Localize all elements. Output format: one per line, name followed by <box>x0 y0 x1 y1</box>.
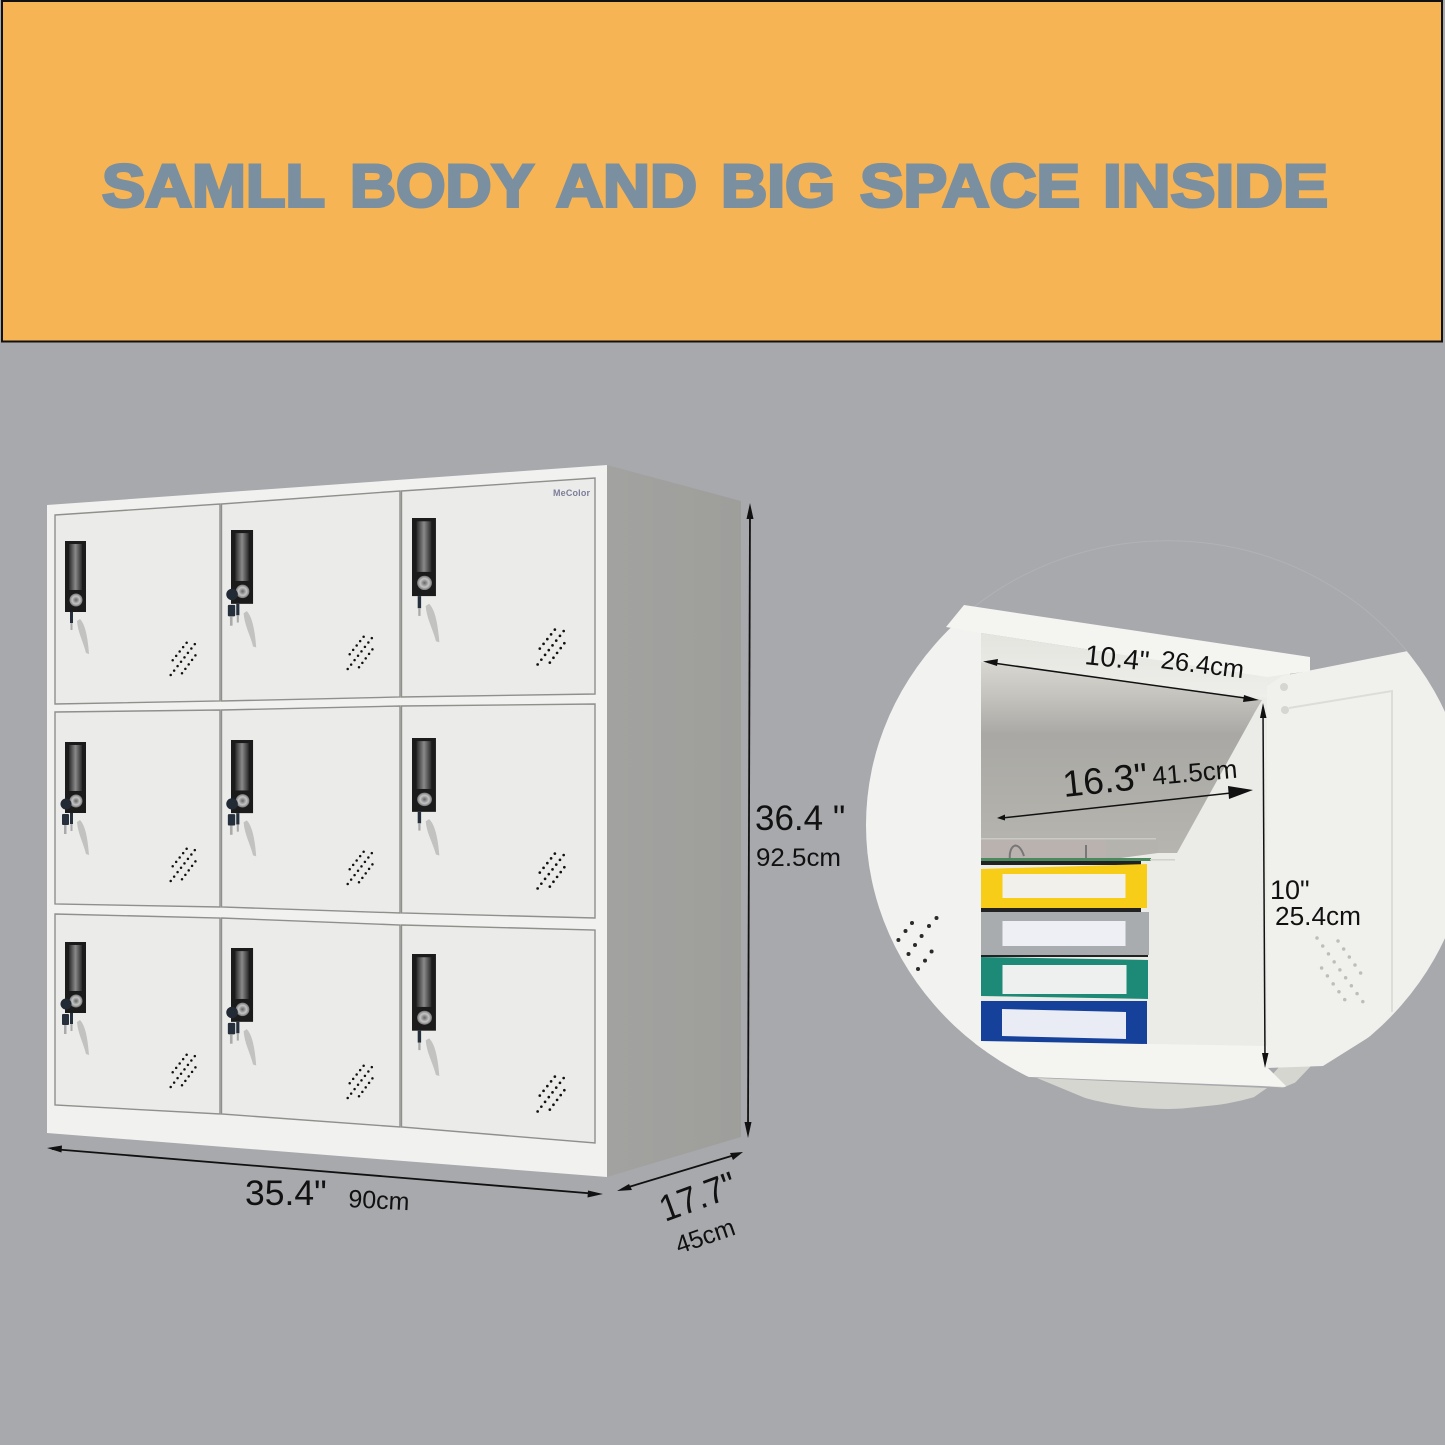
dimension: interior depth: 16.3" <box>1061 755 1150 805</box>
door hinge <box>1280 683 1289 714</box>
dimension: interior depth <box>997 754 1253 820</box>
dimension: interior width: 26.4cm <box>1159 646 1246 684</box>
faint lens outline <box>962 541 1410 655</box>
dimension: cabinet height <box>744 503 845 1138</box>
top binder rings <box>981 838 1175 865</box>
binders <box>981 838 1175 1044</box>
top frame of open locker <box>946 605 1310 698</box>
dimension: interior depth: 41.5cm <box>1151 754 1238 791</box>
dimension: interior width: 10.4" <box>1083 639 1151 677</box>
locker cabinet <box>47 465 741 1177</box>
brand logo: MeColor <box>553 488 590 498</box>
ventilation holes <box>171 627 567 1111</box>
dimension: cabinet depth: 17.7" <box>654 1164 742 1230</box>
interior wall <box>981 640 1290 1050</box>
title: INSIDE <box>1103 152 1328 220</box>
inset: open locker interior <box>840 620 1445 1112</box>
title: SPACE <box>860 152 1080 220</box>
cabinet front frame <box>47 465 607 1177</box>
title <box>102 152 1328 220</box>
dimension: cabinet height: 92.5cm <box>756 844 841 872</box>
dimension: cabinet width: 90cm <box>348 1185 410 1216</box>
dimension: cabinet width <box>47 1146 603 1216</box>
left door vent holes <box>896 916 938 971</box>
outer frame band <box>946 605 1310 677</box>
dimension: cabinet width: 35.4" <box>245 1173 327 1213</box>
dimension: interior width <box>983 639 1259 702</box>
open door vent holes <box>1317 938 1364 1004</box>
open door <box>1267 651 1445 1068</box>
title: AND <box>556 152 697 220</box>
dimension: cabinet depth: 45cm <box>672 1213 739 1260</box>
dimension: interior height <box>1260 703 1361 1068</box>
grey binder <box>981 912 1149 955</box>
ledge underside <box>1037 1078 1267 1112</box>
title: BODY <box>350 152 534 220</box>
cabinet side panel <box>607 465 741 1177</box>
title banner <box>2 1 1442 342</box>
dimension: interior height: 10" <box>1270 875 1310 905</box>
left door frame <box>866 628 981 1048</box>
bottom ledge <box>975 1041 1287 1087</box>
title: SAMLL <box>102 152 325 220</box>
dimension: interior height: 25.4cm <box>1275 903 1361 931</box>
door handles and keys <box>60 518 439 1076</box>
dimension: cabinet depth <box>617 1152 743 1260</box>
yellow binder <box>981 864 1147 913</box>
door bracket shadow <box>1262 1066 1311 1088</box>
door inner fold <box>1289 691 1392 1012</box>
shadowed back wall <box>981 662 1262 853</box>
title: BIG <box>721 152 835 220</box>
dimension: cabinet height: 36.4 " <box>755 799 845 838</box>
inner frame lip <box>981 633 1267 698</box>
locker doors <box>55 478 595 1143</box>
blue binder <box>981 1001 1147 1044</box>
teal binder <box>981 955 1148 999</box>
